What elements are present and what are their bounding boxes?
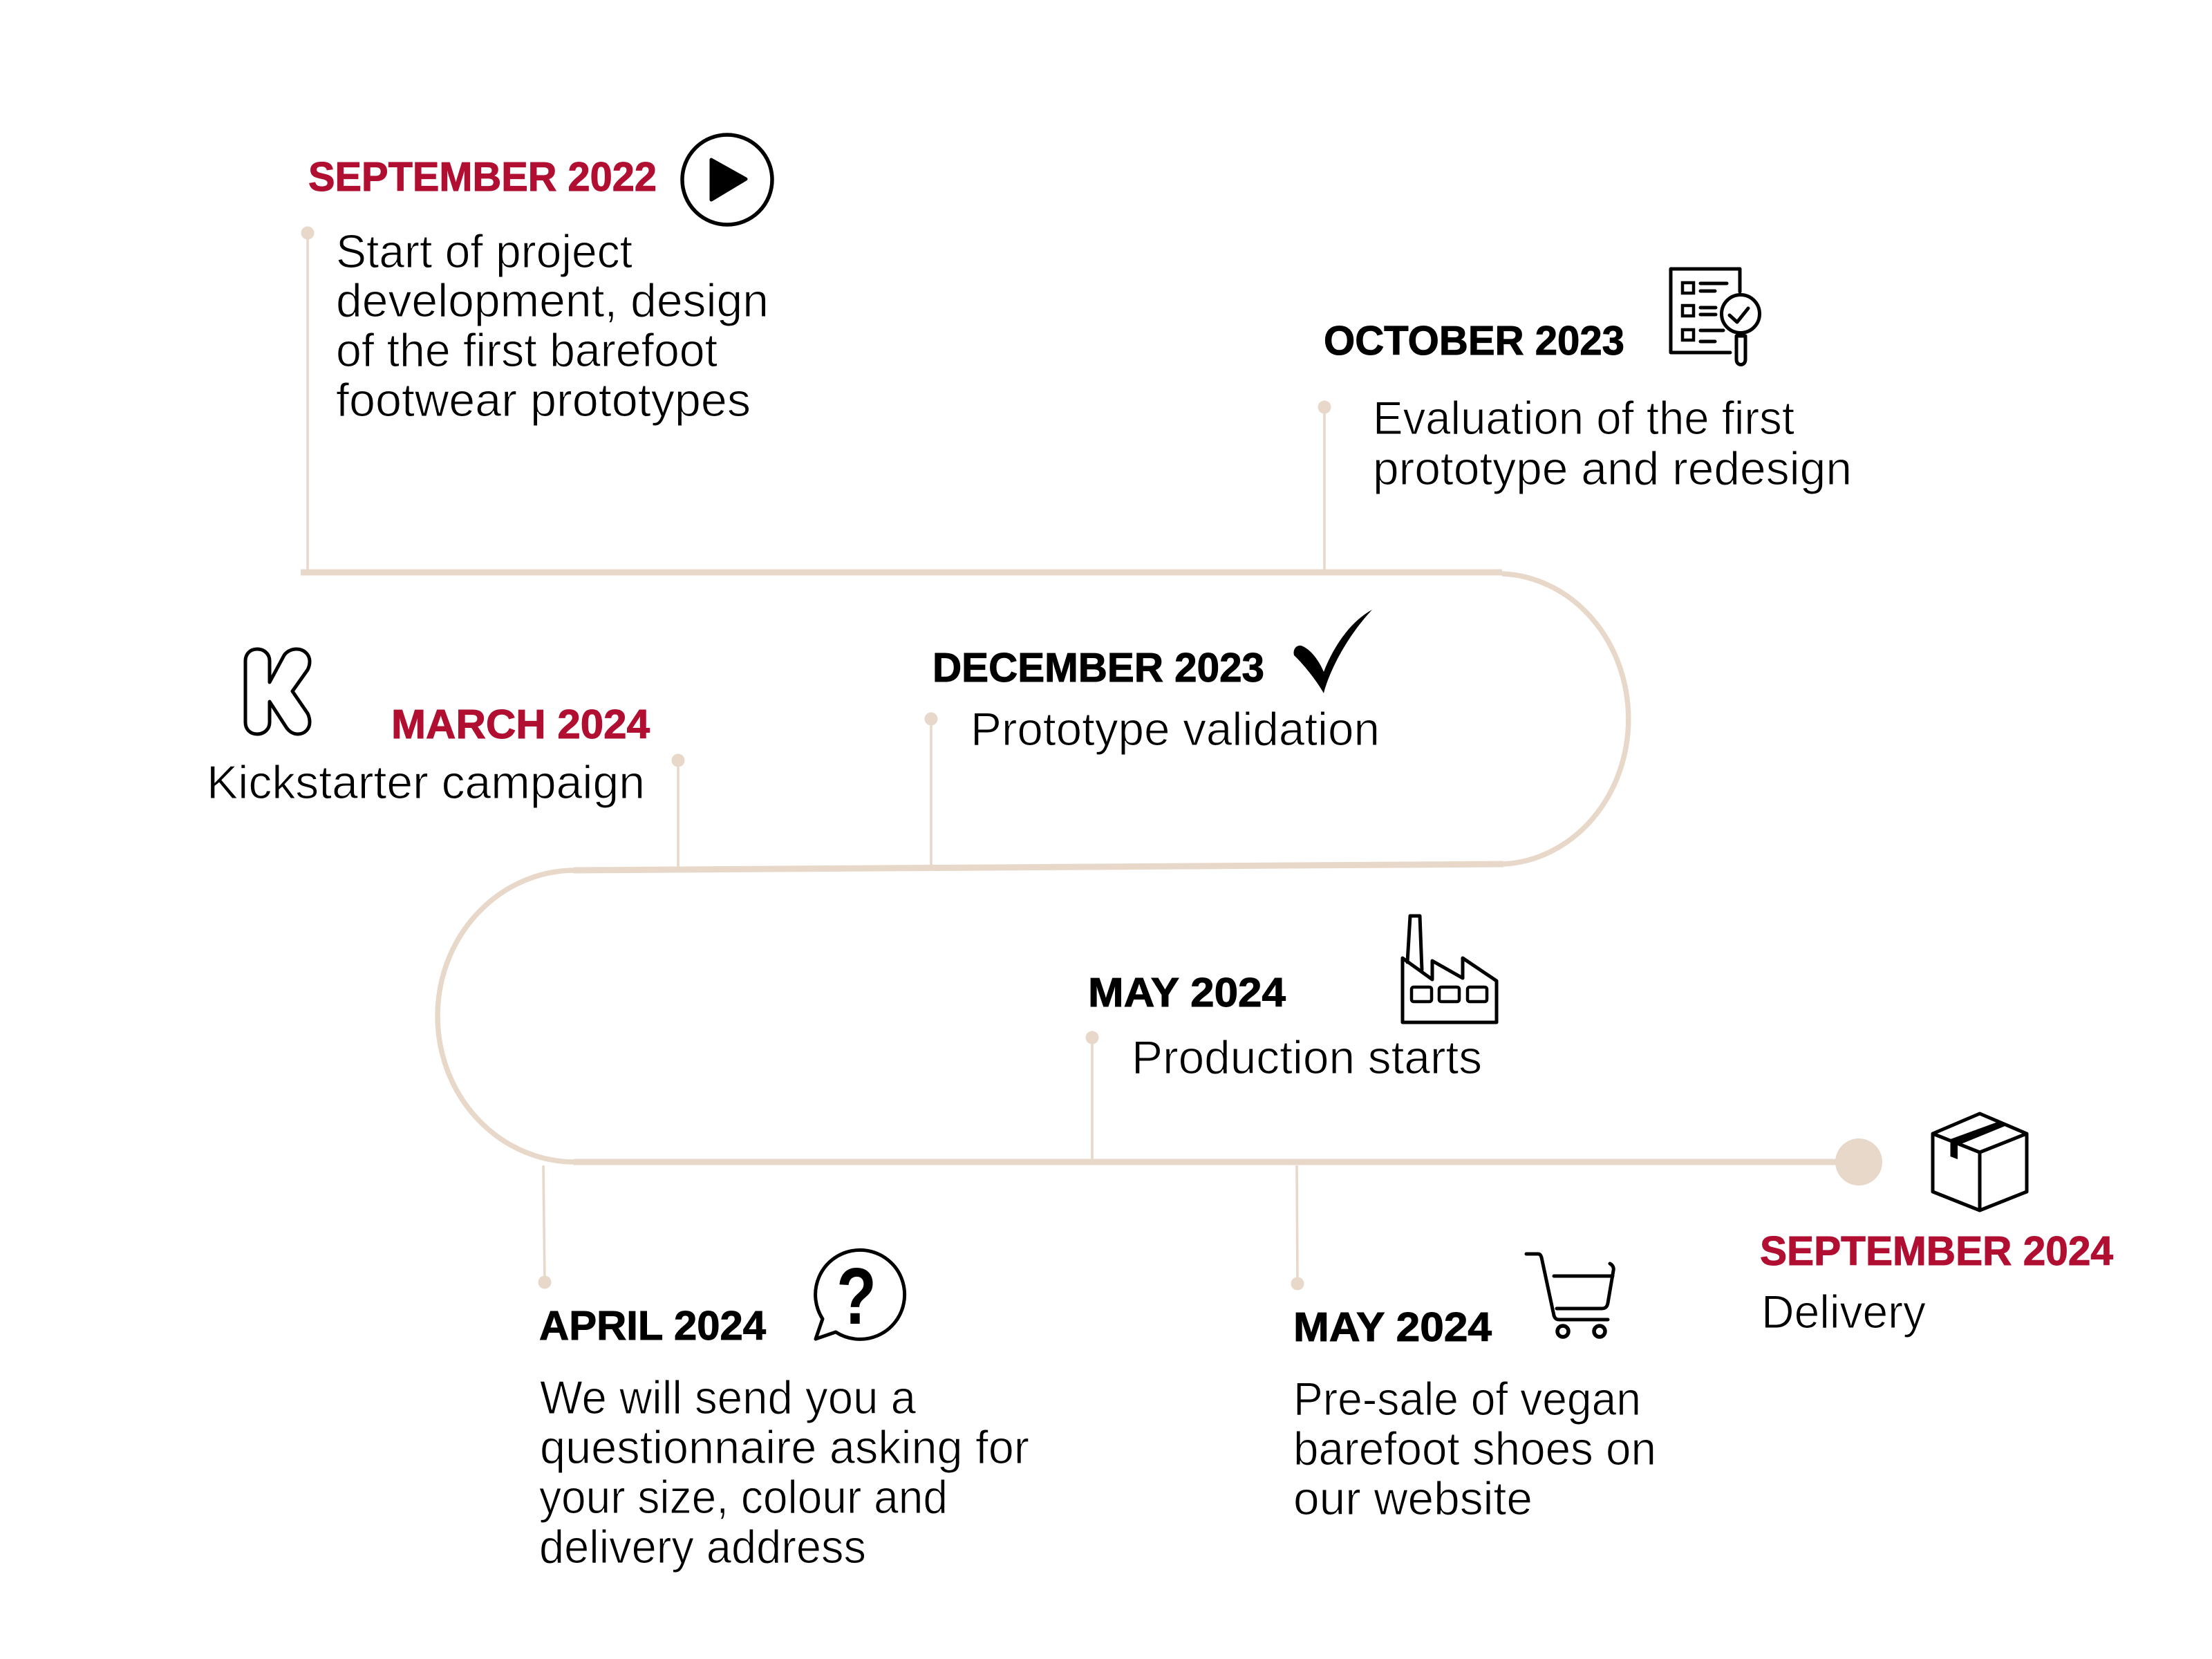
description <box>1293 1373 1656 1525</box>
connector <box>538 1165 552 1288</box>
description: Prototype validation <box>971 703 1380 756</box>
description: questionnaire asking for <box>540 1421 1029 1474</box>
icon: question speech bubble <box>816 1250 905 1341</box>
winding timeline path <box>301 572 1882 1185</box>
description: Kickstarter campaign <box>207 756 645 809</box>
date heading: OCTOBER 2023 <box>1324 318 1624 364</box>
description: prototype and redesign <box>1373 442 1852 495</box>
description <box>1373 392 1852 495</box>
milestone: March 2024 <box>207 649 684 868</box>
connector <box>301 227 314 571</box>
icon: Kickstarter K <box>245 649 310 734</box>
connector <box>672 753 684 868</box>
milestone: May 2024 production <box>1085 916 1497 1160</box>
icon: shopping cart <box>1526 1254 1613 1337</box>
date heading: MARCH 2024 <box>391 702 650 747</box>
connector <box>925 712 937 865</box>
description: Evaluation of the first <box>1373 392 1794 444</box>
description <box>539 1371 1029 1573</box>
date heading: DECEMBER 2023 <box>932 645 1264 691</box>
description: Start of project <box>336 225 632 278</box>
description: your size, colour and <box>539 1471 948 1524</box>
date heading: MAY 2024 <box>1088 970 1286 1015</box>
description: barefoot shoes on <box>1293 1423 1656 1475</box>
date heading: SEPTEMBER 2024 <box>1760 1228 2113 1274</box>
milestone: December 2023 <box>925 610 1380 865</box>
description: development, design <box>336 274 769 327</box>
milestone: April 2024 <box>538 1165 1029 1573</box>
milestone: September 2022 <box>301 135 772 571</box>
description: Delivery <box>1761 1286 1926 1338</box>
date heading: SEPTEMBER 2022 <box>308 154 657 200</box>
description: We will send you a <box>540 1371 916 1424</box>
description <box>336 225 769 427</box>
date heading: MAY 2024 <box>1293 1304 1492 1350</box>
description: delivery address <box>539 1521 866 1573</box>
description: footwear prototypes <box>336 374 751 427</box>
connector <box>1085 1031 1099 1160</box>
description: Production starts <box>1132 1031 1482 1084</box>
connector <box>1291 1165 1304 1290</box>
milestone: May 2024 pre-sale <box>1291 1165 1656 1525</box>
description: our website <box>1293 1472 1533 1525</box>
icon: question speech bubble: ? <box>836 1251 877 1341</box>
icon: factory <box>1403 916 1497 1022</box>
icon: check mark <box>1294 610 1372 693</box>
milestone: October 2023 <box>1318 269 1852 571</box>
milestone: September 2024 <box>1760 1114 2113 1338</box>
description: of the first barefoot <box>336 324 718 377</box>
icon: checklist with magnifier <box>1671 269 1760 365</box>
icon: parcel box <box>1933 1114 2027 1210</box>
date heading: APRIL 2024 <box>539 1303 766 1349</box>
description: Pre-sale of vegan <box>1293 1373 1641 1425</box>
connector <box>1318 401 1331 571</box>
icon: play button <box>682 135 772 225</box>
